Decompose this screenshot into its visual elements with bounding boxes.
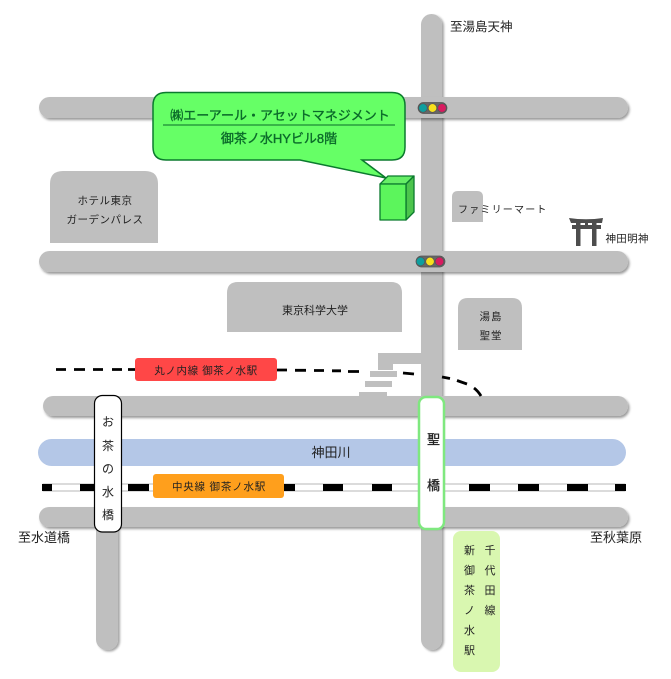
horizontal road 3 (43, 396, 628, 416)
river: 神田川 (38, 439, 626, 466)
bridge: お茶の水橋: 茶 (102, 439, 114, 453)
label: 丸ノ内線 御茶ノ水駅 (135, 358, 277, 381)
label: 千代田線 新御茶ノ水駅: 田 (484, 585, 496, 597)
building: ホテル東京ガーデンパレス (50, 171, 158, 243)
bridge: お茶の水橋: 水 (102, 485, 114, 499)
bridge: 聖橋 (419, 397, 444, 529)
building: 東京科学大学 (227, 282, 402, 332)
bridge: お茶の水橋: お (102, 415, 114, 429)
bridge: お茶の水橋: の (102, 462, 114, 476)
bridge: お茶の水橋: 橋 (102, 508, 114, 522)
building: ホテル東京ガーデンパレス: ホテル東京 (78, 194, 132, 207)
traffic light lower (416, 256, 445, 267)
building: ファミリーマート (452, 191, 548, 222)
callout: company and building name: 御茶ノ水HYビル8階 (221, 131, 337, 146)
building: 湯島聖堂: 聖堂 (480, 330, 502, 342)
railway: 中央線 (42, 484, 626, 491)
label: 中央線 御茶ノ水駅: 中央線 御茶ノ水駅 (172, 480, 266, 493)
river: 神田川: 神田川 (311, 445, 351, 460)
label: 丸ノ内線 御茶ノ水駅: 丸ノ内線 御茶ノ水駅 (154, 364, 258, 377)
label: 千代田線 新御茶ノ水駅: 線 (484, 604, 496, 617)
label: 神田明神: 神田明神 (606, 232, 649, 245)
label: 至秋葉原: 至秋葉原 (590, 530, 642, 545)
icon: torii gate (569, 218, 603, 246)
icon: green building (380, 176, 414, 220)
bridge: お茶の水橋 (94, 396, 122, 532)
label: 千代田線 新御茶ノ水駅: 千 (484, 544, 496, 557)
traffic light upper (418, 102, 447, 114)
horizontal road 2 (39, 251, 628, 272)
bridge: 聖橋: 橋 (427, 478, 440, 493)
label: 千代田線 新御茶ノ水駅 (453, 531, 500, 672)
vertical road: お茶の水橋 street (96, 500, 118, 650)
bridge: 聖橋: 聖 (427, 432, 440, 447)
callout: company and building name (153, 92, 405, 178)
horizontal road 1 (39, 97, 628, 118)
horizontal road 4 (39, 507, 628, 527)
metro line: 丸ノ内線 dashed (56, 370, 481, 396)
vertical road: 聖橋 street (421, 14, 442, 650)
callout: company and building name: ㈱エーアール・アセットマネジメント (170, 108, 390, 123)
label: 千代田線 新御茶ノ水駅: 代 (484, 564, 496, 577)
label: 千代田線 新御茶ノ水駅: 水 (464, 624, 475, 637)
label: 中央線 御茶ノ水駅 (153, 474, 284, 498)
label: 千代田線 新御茶ノ水駅: ノ (464, 605, 475, 617)
building: 東京科学大学: 東京科学大学 (282, 303, 348, 317)
label: 至湯島天神: 至湯島天神 (450, 19, 513, 34)
building: 湯島聖堂 (458, 298, 522, 350)
building: ファミリーマート: ファミリーマート (458, 205, 548, 216)
building: ホテル東京ガーデンパレス: ガーデンパレス (66, 213, 144, 226)
building: 湯島聖堂: 湯島 (480, 310, 502, 323)
label: 千代田線 新御茶ノ水駅: 駅 (464, 644, 475, 657)
station entrance stairs (359, 353, 421, 396)
label: 千代田線 新御茶ノ水駅: 御 (464, 563, 475, 577)
label: 千代田線 新御茶ノ水駅: 新 (464, 544, 475, 557)
label: 至水道橋: 至水道橋 (18, 530, 70, 545)
label: 千代田線 新御茶ノ水駅: 茶 (464, 583, 475, 597)
